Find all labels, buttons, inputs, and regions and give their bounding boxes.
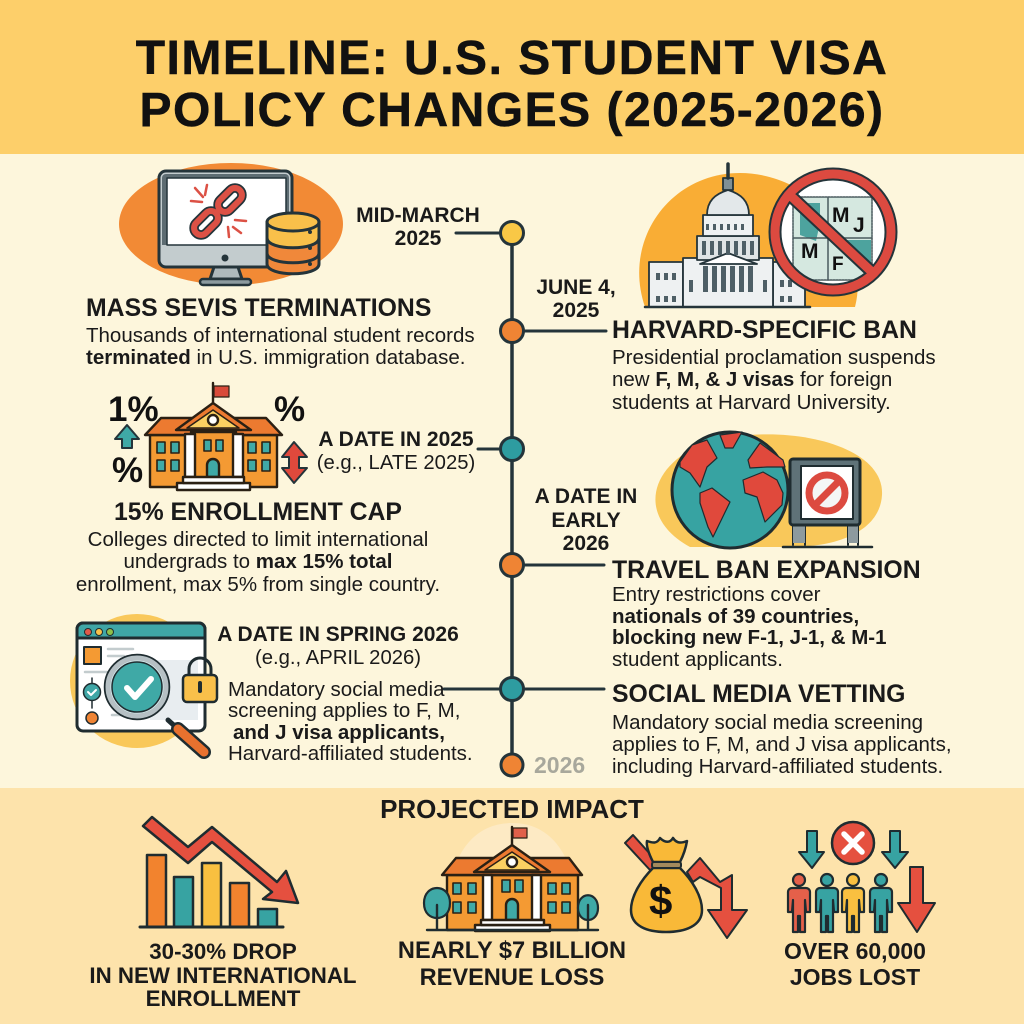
icon: browser with magnifier	[70, 614, 217, 752]
date: mid-march 2025: 2025	[395, 227, 441, 250]
date: june 4 2025	[536, 276, 616, 322]
stat: enrollment drop: ENROLLMENT	[146, 986, 300, 1011]
title	[136, 32, 888, 137]
icon: falling bar chart	[140, 817, 298, 927]
date: june 4 2025: 2025	[553, 299, 599, 322]
heading: projected impact: PROJECTED IMPACT	[380, 794, 644, 824]
text: spring 2026 screening: and J visa applicants,	[233, 721, 445, 744]
text: travel ban expansion: student applicants.	[612, 648, 783, 671]
header band	[0, 0, 1024, 154]
icon labels inside graphics: %	[274, 390, 305, 429]
title: TIMELINE: U.S. STUDENT VISA	[136, 32, 888, 85]
icon: computer with broken link and database	[119, 163, 343, 285]
stat: enrollment drop	[89, 939, 357, 1011]
text: spring 2026 screening	[228, 678, 473, 765]
text: travel ban expansion	[612, 557, 921, 671]
date: a date in 2025	[317, 428, 475, 474]
stat: jobs lost	[784, 938, 926, 990]
text: travel ban expansion: nationals of 39 countries,	[612, 605, 859, 628]
stat: revenue loss: REVENUE LOSS	[420, 964, 604, 990]
text: travel ban expansion: TRAVEL BAN EXPANSION	[612, 557, 921, 584]
icon labels inside graphics: M	[801, 240, 818, 263]
date: spring 2026: A DATE IN SPRING 2026	[217, 623, 459, 646]
stat: revenue loss: NEARLY $7 BILLION	[398, 938, 626, 964]
timeline axis	[444, 222, 606, 776]
text: mass sevis terminations	[86, 295, 475, 369]
icon: globe and no-entry sign	[655, 432, 882, 548]
date: a date in 2025: (e.g., LATE 2025)	[317, 452, 475, 474]
text: harvard-specific ban: Presidential proclamation suspends	[612, 346, 936, 369]
date: early 2026: A DATE IN	[535, 485, 637, 508]
text: mass sevis terminations: terminated in U.S. immigration database.	[86, 346, 465, 369]
text: 15% enrollment cap: undergrads to max 15% total	[124, 550, 392, 573]
stat: enrollment drop: IN NEW INTERNATIONAL	[89, 963, 357, 988]
text: social media vetting: Mandatory social media screening	[612, 711, 923, 734]
date: spring 2026	[217, 623, 459, 669]
text: social media vetting: SOCIAL MEDIA VETTING	[612, 681, 905, 708]
date: a date in 2025: A DATE IN 2025	[318, 428, 474, 451]
stat: enrollment drop: 30-30% DROP	[149, 939, 297, 964]
icon labels inside graphics: %	[112, 451, 143, 490]
stat: revenue loss	[398, 938, 626, 990]
date: early 2026: 2026	[563, 532, 609, 555]
text: travel ban expansion: Entry restrictions cover	[612, 583, 820, 606]
icon labels inside graphics: $	[649, 877, 672, 924]
icon labels inside graphics: F	[832, 254, 844, 275]
icon: college with money loss	[424, 823, 747, 938]
text: harvard-specific ban: HARVARD-SPECIFIC BAN	[612, 317, 917, 344]
text: travel ban expansion: blocking new F-1, J-1, & M-1	[612, 626, 887, 649]
date: early 2026	[535, 485, 637, 555]
text: 15% enrollment cap: 15% ENROLLMENT CAP	[114, 499, 402, 526]
text: 15% enrollment cap	[76, 499, 440, 596]
text: harvard-specific ban	[612, 317, 936, 414]
text: social media vetting: applies to F, M, and J visa applicants,	[612, 733, 952, 756]
icon labels inside graphics	[108, 204, 865, 924]
text: spring 2026 screening: screening applies to F, M,	[228, 699, 460, 722]
impact band	[0, 788, 1024, 1024]
title: POLICY CHANGES (2025-2026)	[139, 84, 885, 137]
stat: jobs lost: OVER 60,000	[784, 938, 926, 964]
text: 15% enrollment cap: enrollment, max 5% from single country.	[76, 573, 440, 596]
date: early 2026: EARLY	[551, 509, 621, 532]
date: mid-march 2025	[356, 204, 480, 250]
date: spring 2026: (e.g., APRIL 2026)	[255, 647, 421, 669]
icon: college with percentages	[115, 383, 307, 490]
icon: capitol and visa ban	[639, 164, 891, 307]
icon labels inside graphics: 1%	[108, 390, 159, 429]
text: harvard-specific ban: new F, M, & J visas for foreign	[612, 368, 892, 391]
icon labels inside graphics: J	[853, 214, 865, 237]
text: harvard-specific ban: students at Harvard University.	[612, 391, 891, 414]
text: social media vetting: including Harvard-affiliated students.	[612, 755, 943, 778]
date: june 4 2025: JUNE 4,	[536, 276, 616, 299]
stat: jobs lost: JOBS LOST	[790, 964, 920, 990]
text: mass sevis terminations: MASS SEVIS TERMINATIONS	[86, 295, 431, 322]
icon: people and jobs lost	[788, 822, 935, 932]
text: social media vetting	[612, 681, 952, 778]
text: spring 2026 screening: Harvard-affiliated students.	[228, 742, 473, 765]
text: spring 2026 screening: Mandatory social media	[228, 678, 444, 701]
text: mass sevis terminations: Thousands of international student records	[86, 324, 475, 347]
text: 15% enrollment cap: Colleges directed to limit international	[88, 528, 428, 551]
icon labels inside graphics: M	[832, 204, 850, 227]
label: 2026: 2026	[534, 752, 585, 778]
date: mid-march 2025: MID-MARCH	[356, 204, 480, 227]
